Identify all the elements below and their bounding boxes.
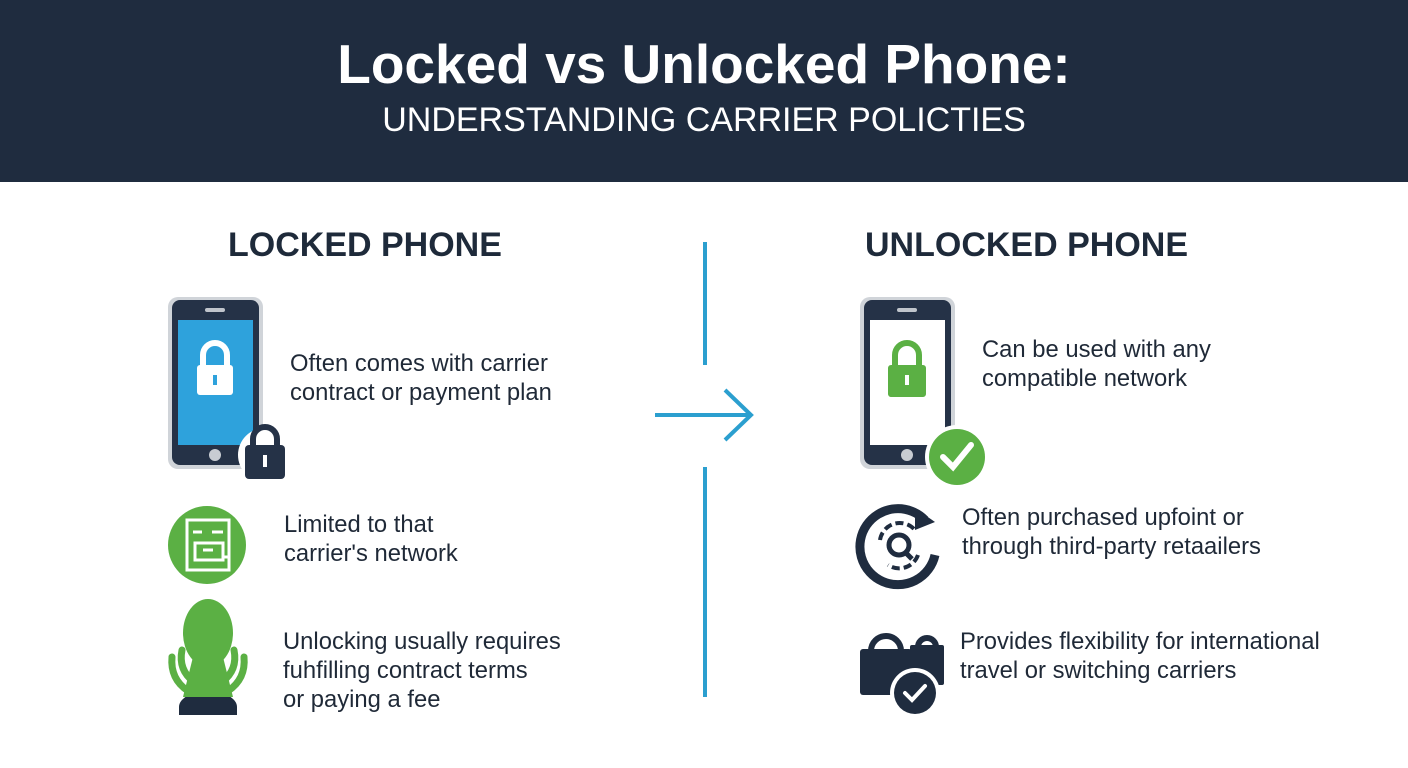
icon: network box <box>168 506 246 584</box>
text: unlocked 2: through third-party retaailers <box>962 533 1261 560</box>
text: unlocked 2: Often purchased upfoint or <box>962 504 1244 531</box>
icon: bags <box>860 633 944 714</box>
text: unlocked 1: compatible network <box>982 365 1187 392</box>
text: unlocked 2 <box>962 504 1261 560</box>
text: locked 3 <box>283 628 561 713</box>
text: locked 3: Unlocking usually requires <box>283 628 561 655</box>
text: unlocked 3 <box>960 628 1320 684</box>
text: locked 2: Limited to that <box>284 511 433 538</box>
icon: cycle <box>855 504 940 590</box>
text: unlocked 1 <box>982 336 1211 392</box>
text: locked 1: contract or payment plan <box>290 379 552 406</box>
text: locked 1 <box>290 350 552 406</box>
text: locked 3: or paying a fee <box>283 686 440 713</box>
text: unlocked 3: travel or switching carriers <box>960 657 1236 684</box>
text: locked 2 <box>284 511 458 567</box>
heading: locked: LOCKED PHONE <box>228 226 502 264</box>
text: locked 1: Often comes with carrier <box>290 350 548 377</box>
text: locked 2: carrier's network <box>284 540 458 567</box>
icon: unlocked phone <box>860 297 985 485</box>
arrow <box>655 390 751 440</box>
header <box>0 0 1408 182</box>
subtitle: UNDERSTANDING CARRIER POLICTIES <box>382 101 1026 139</box>
text: unlocked 1: Can be used with any <box>982 336 1211 363</box>
heading: unlocked: UNLOCKED PHONE <box>865 226 1188 264</box>
icon: person <box>168 599 248 715</box>
divider with arrow <box>655 242 754 697</box>
text: unlocked 3: Provides flexibility for international <box>960 628 1320 655</box>
icon: locked phone <box>168 297 285 479</box>
title: Locked vs Unlocked Phone: <box>337 33 1071 95</box>
text: locked 3: fuhfilling contract terms <box>283 657 528 684</box>
